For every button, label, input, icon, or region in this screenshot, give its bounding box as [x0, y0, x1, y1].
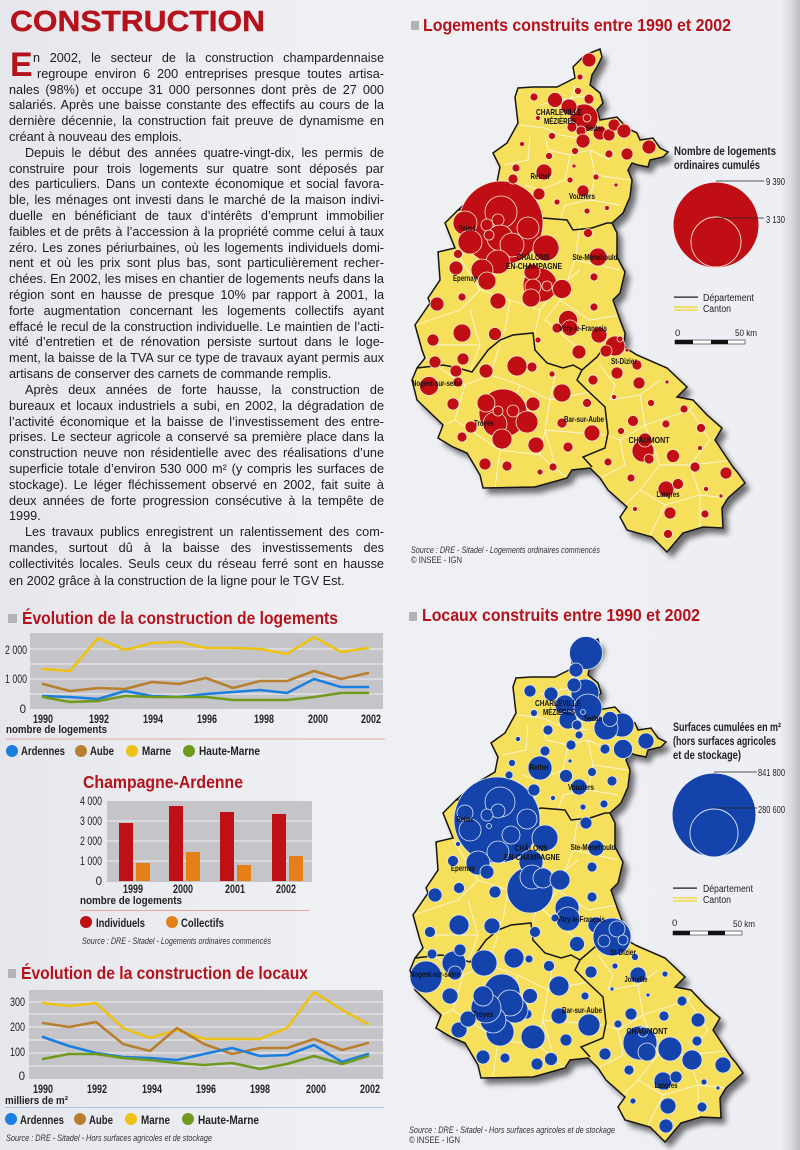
map: logements construits: Ste-Ménehould — [572, 252, 618, 262]
text block: article: région sont en hausse de presque 10% par rapport à 2001, la — [9, 288, 384, 302]
source: carte locaux: © INSEE - IGN — [409, 1135, 460, 1145]
map: logements construits: CHAUMONT — [628, 435, 670, 445]
legend: surfaces cumulées: et de stockage) — [673, 748, 741, 762]
text block: article: l’activité économique et la baisse de l’investissement des entre- — [9, 415, 384, 429]
line chart: locaux par département: 1996 — [196, 1084, 216, 1096]
line chart: logements par département: 1990 — [33, 714, 53, 726]
line chart: locaux par département: 200 — [10, 1022, 25, 1034]
legend: logements cumulés: 3 130 — [766, 215, 785, 226]
legend: département et canton — [674, 293, 754, 315]
legend: département et canton, carte locaux: Canton — [703, 895, 731, 906]
line chart: locaux par département: milliers de m² — [5, 1095, 68, 1107]
map: logements construits: St-Dizier — [611, 356, 638, 366]
bar chart: Champagne-Ardenne: 1999 — [123, 884, 143, 896]
text block: article: des particuliers. Dans un contexte économique et social favora- — [9, 177, 384, 191]
legend: département et canton: Département — [703, 293, 754, 304]
text block: article: nales (98%) et occupe 31 000 personnes dont près de 27 000 — [9, 83, 384, 97]
legend: département et canton, carte locaux — [673, 884, 753, 906]
text block: article: prises. Le secteur agricole a conservé sa première place dans la — [9, 430, 384, 444]
text block: article: faibles et de prêts à l’accession à la propriété comme celui à taux — [9, 225, 384, 239]
scale bar — [675, 328, 757, 344]
bar chart: Champagne-Ardenne: 0 — [96, 876, 102, 888]
map: logements construits: Sedan — [586, 123, 604, 133]
line chart: locaux par département: 1990 — [33, 1084, 53, 1096]
map: logements construits: Vitry-le-François — [559, 323, 607, 333]
heading: évolution logements: Évolution de la construction de logements — [22, 607, 338, 628]
bar chart: Champagne-Ardenne: 4 000 — [80, 796, 102, 808]
scale bar: 0 — [675, 328, 680, 339]
line chart: locaux par département: 2002 — [360, 1084, 380, 1096]
line chart: logements par département: 1996 — [197, 714, 217, 726]
text block: article: ment, la baisse de la TVA sur ce type de travaux ayant permis aux — [9, 351, 384, 365]
text block: article: vité d’entretien et de rénovation persiste surtout dans le loge- — [9, 335, 384, 349]
line chart: logements par département: 2 000 — [5, 645, 27, 657]
map: logements construits: CHARLEVILLE — [536, 107, 582, 117]
text block: article: Les travaux publics enregistrent un ralentissement des com- — [25, 525, 384, 539]
text block: article: stockage). Le léger fléchissement observé en 2002, fait suite à — [9, 478, 384, 492]
text block: article: salariés. Après une baisse constante des effectifs au cours de la — [9, 98, 384, 112]
map: locaux construits: Troyes — [473, 1009, 493, 1019]
line chart: logements par département: 1998 — [254, 714, 274, 726]
text block: article — [9, 46, 384, 588]
text block: article: artisans de conserver des carnets de commande remplis. — [9, 367, 331, 381]
map: logements construits — [412, 49, 750, 558]
line chart: logements par département: 0 — [20, 704, 26, 716]
bar chart: Champagne-Ardenne: 2000 — [173, 884, 193, 896]
line chart: logements par département: nombre de logements — [6, 724, 107, 736]
map: locaux construits: CHAUMONT — [626, 1026, 668, 1036]
text block: article: ble, les ménages ont investi dans le marché de la maison indivi- — [9, 193, 384, 207]
bar chart: Champagne-Ardenne: 3 000 — [80, 816, 102, 828]
legend: surfaces cumulées: 841 800 — [758, 768, 785, 779]
bar chart: Champagne-Ardenne: 1 000 — [80, 856, 102, 868]
map: locaux construits: Langres — [654, 1080, 678, 1090]
legend: département et canton: Canton — [703, 304, 731, 315]
legend: individuels et collectifs: Collectifs — [181, 916, 224, 930]
map: locaux construits: St-Dizier — [610, 947, 637, 957]
text block: article: en 2002 grâce à la construction de la ligne pour le TGV Est. — [9, 574, 344, 588]
map: logements construits: Troyes — [474, 418, 494, 428]
bar chart: Champagne-Ardenne: 2 000 — [80, 836, 102, 848]
map: locaux construits: Vouziers — [568, 782, 594, 792]
map: logements construits: Epernay — [453, 273, 477, 283]
map: logements construits: MÉZIÈRES — [544, 116, 576, 126]
map: locaux construits: Sedan — [584, 713, 602, 723]
text block: article: deux années de forte progression consécutive à la tempête de — [9, 494, 384, 508]
legend: département et canton, carte locaux: Département — [703, 884, 753, 895]
map: locaux construits: Ste-Ménehould — [570, 842, 616, 852]
text block: article: superficie totale d’environ 530 000 m² (y compris les surfaces de — [9, 462, 384, 476]
scale bar: 50 km — [735, 328, 757, 339]
map: locaux construits: Nogent-sur-seine — [410, 969, 460, 979]
text block: article: chées. En 2002, les mises en chantier de logements neufs dans la — [9, 272, 384, 286]
legend: individuels et collectifs: Individuels — [96, 916, 145, 930]
legend: départements logements: Ardennes — [21, 744, 65, 758]
heading: évolution locaux: Évolution de la construction de locaux — [21, 962, 308, 983]
text block: article: nent et où les prix sont plus bas, sont particulièrement recher- — [9, 256, 384, 270]
legend: surfaces cumulées: 280 600 — [758, 805, 785, 816]
source: carte locaux: Source : DRE - Sitadel - Hors surfaces agricoles et de stockage — [409, 1125, 615, 1135]
legend: individuels et collectifs — [80, 916, 224, 930]
legend: logements cumulés: Nombre de logements — [674, 144, 776, 158]
text block: article: créant à nouveau des emplois. — [9, 130, 182, 144]
map: logements construits: EN-CHAMPAGNE — [506, 261, 562, 271]
scale bar, carte locaux — [672, 918, 755, 935]
legend: départements locaux: Marne — [141, 1113, 170, 1127]
source: carte locaux — [409, 1125, 615, 1145]
legend: logements cumulés — [674, 144, 785, 268]
line chart: logements par département: 1 000 — [5, 674, 27, 686]
scale bar, carte locaux: 0 — [672, 918, 677, 929]
legend: départements locaux: Ardennes — [20, 1113, 64, 1127]
text block: article: bureaux et locaux industriels a subi, en 2002, la dégradation de — [9, 399, 384, 413]
map: locaux construits: Rethel — [530, 762, 548, 772]
heading: logements construits: Logements construits entre 1990 et 2002 — [423, 15, 731, 35]
map: logements construits: Vouziers — [569, 191, 595, 201]
text block: article: E — [10, 46, 33, 84]
line chart: locaux par département — [5, 990, 384, 1108]
bar chart: Champagne-Ardenne: 2001 — [225, 884, 245, 896]
scale bar, carte locaux: 50 km — [733, 919, 755, 930]
map: locaux construits: CHARLEVILLE — [535, 698, 581, 708]
legend: départements locaux — [5, 1113, 259, 1127]
legend: départements locaux: Haute-Marne — [198, 1113, 259, 1127]
line chart: logements par département: 1992 — [89, 714, 109, 726]
map: logements construits: Reims — [458, 223, 476, 233]
text block: article: regroupe environ 6 200 entreprises presque toutes artisa- — [37, 67, 384, 81]
map: logements construits: CHÂLONS — [516, 251, 550, 262]
bar chart: Champagne-Ardenne — [80, 796, 312, 911]
line chart: locaux par département: 2000 — [306, 1084, 326, 1096]
text block: article: duelle en bénéficiant de taux d’intérêts d’emprunt immobilier — [9, 209, 384, 223]
legend: départements logements — [6, 744, 260, 758]
source: logements: Source : DRE - Sitadel - Logements ordinaires commencés — [82, 936, 271, 946]
map: locaux construits: CHÂLONS — [514, 842, 548, 853]
bar chart: Champagne-Ardenne: 2002 — [276, 884, 296, 896]
line chart: locaux par département: 300 — [10, 997, 25, 1009]
heading: Champagne-Ardenne: Champagne-Ardenne — [83, 772, 243, 792]
text block: article: effacé le recul de la construction individuelle. Le maintien de l’acti- — [9, 320, 384, 334]
source: locaux: Source : DRE - Sitadel - Hors surfaces agricoles et de stockage — [6, 1133, 212, 1143]
text block: article: dernière décennie, la construction fait preuve de dynamisme en — [9, 114, 384, 128]
map: locaux construits: Bar-sur-Aube — [562, 1005, 602, 1015]
source: carte logements: © INSEE - IGN — [411, 555, 462, 565]
text block: article: zéro. Les zones périurbaines, où les logements individuels domi- — [9, 241, 384, 255]
heading: locaux construits: Locaux construits entre 1990 et 2002 — [422, 605, 700, 625]
text block: article: construire pour trois logements sur quatre sont déposés par — [9, 162, 384, 176]
map: logements construits: Bar-sur-Aube — [564, 414, 604, 424]
source: carte logements: Source : DRE - Sitadel - Logements ordinaires commencés — [411, 545, 600, 555]
text block: article: 1999. — [9, 509, 41, 523]
map: locaux construits: Joinville — [624, 974, 648, 984]
line chart: locaux par département: 1998 — [250, 1084, 270, 1096]
legend: départements locaux: Aube — [89, 1113, 113, 1127]
map: locaux construits: EN-CHAMPAGNE — [504, 852, 560, 862]
line chart: locaux par département: 1992 — [87, 1084, 107, 1096]
line chart: logements par département — [5, 633, 385, 740]
line chart: logements par département: 2000 — [308, 714, 328, 726]
text block: article: construction neuve non résidentielle avec des réalisations d’une — [9, 446, 384, 460]
line chart: logements par département: 2002 — [361, 714, 381, 726]
text block: article: Depuis le début des années quatre-vingt-dix, les permis de — [25, 146, 384, 160]
text block: article: n 2002, le secteur de la construction champardennaise — [33, 51, 384, 65]
legend: logements cumulés: 9 390 — [766, 177, 785, 188]
line chart: locaux par département: 1994 — [142, 1084, 162, 1096]
legend: départements logements: Marne — [142, 744, 171, 758]
text block: article: mandes, surtout dû à la baisse des investissements des — [9, 541, 384, 555]
bar chart: Champagne-Ardenne: nombre de logements — [80, 895, 182, 907]
title: CONSTRUCTION — [10, 6, 265, 38]
line chart: locaux par département: 0 — [19, 1071, 25, 1083]
map: logements construits: Rethel — [530, 171, 550, 181]
map: locaux construits: MÉZIÈRES — [543, 707, 575, 717]
source: carte logements — [411, 545, 600, 565]
text block: article: Après deux années de forte hausse, la construction de — [25, 383, 384, 397]
text block: article: forte augmentation concernant les logements collectifs ayant — [9, 304, 384, 318]
map: logements construits: Nogent-sur-seine — [412, 378, 462, 388]
map: locaux construits — [410, 636, 748, 1148]
map: locaux construits: Epernay — [451, 863, 475, 873]
line chart: logements par département: 1994 — [143, 714, 163, 726]
legend: logements cumulés: ordinaires cumulés — [674, 158, 760, 172]
legend: surfaces cumulées — [672, 720, 785, 857]
line chart: locaux par département: 100 — [10, 1047, 25, 1059]
text block: article: collectivités locales. Seuls ceux du réseau ferré sont en hausse — [9, 557, 384, 571]
map: locaux construits: Reims — [456, 814, 474, 824]
map: logements construits: Langres — [656, 489, 680, 499]
legend: départements logements: Aube — [90, 744, 114, 758]
legend: départements logements: Haute-Marne — [199, 744, 260, 758]
map: locaux construits: Vitry-le-François — [557, 914, 605, 924]
